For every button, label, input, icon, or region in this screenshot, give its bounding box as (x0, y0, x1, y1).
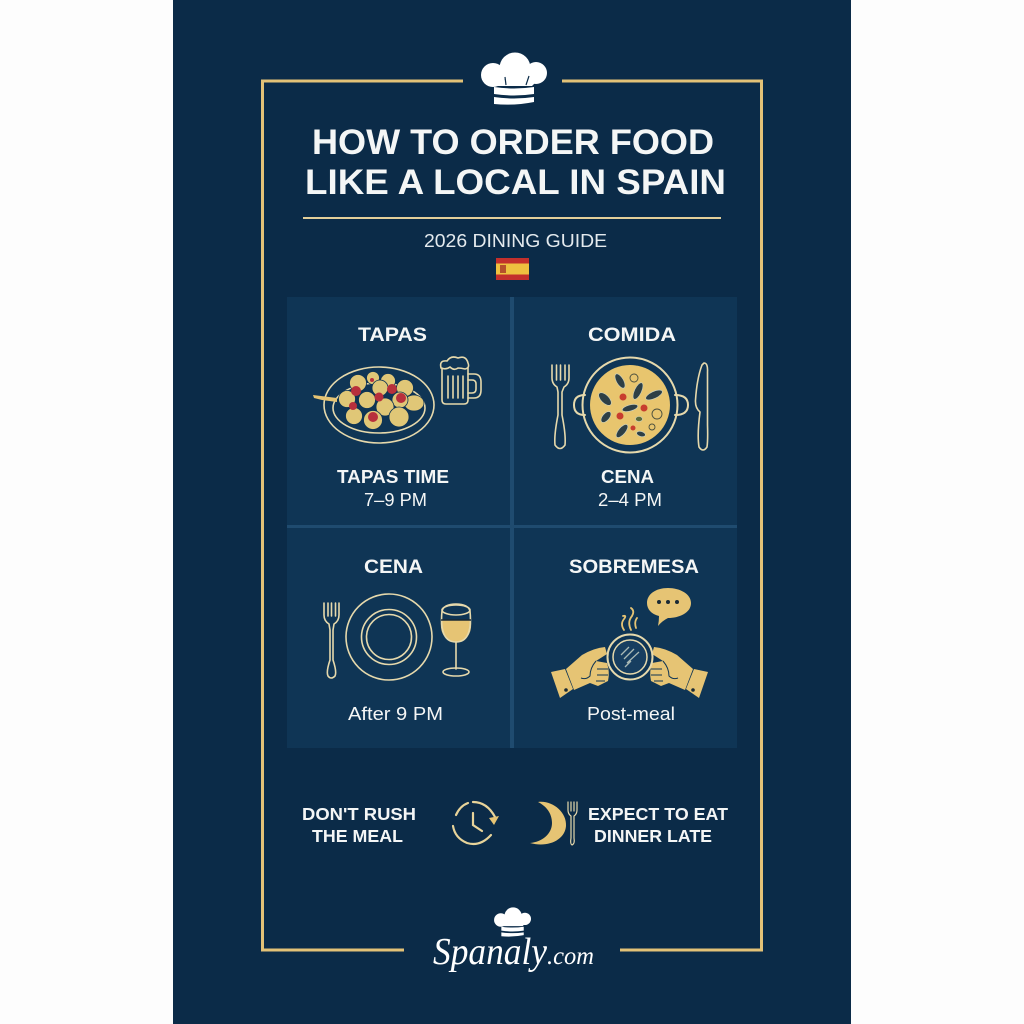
icon: tapas plate (313, 367, 434, 443)
title: HOW TO ORDER FOOD (312, 123, 714, 162)
label: 2-4 pm: 2–4 PM (598, 490, 662, 510)
tip: expect to eat late: DINNER LATE (594, 826, 712, 846)
tip: don't rush: THE MEAL (312, 826, 403, 846)
icon: paella pan (574, 358, 688, 452)
icon: chef hat footer (494, 907, 531, 937)
panel: sobremesa (514, 528, 737, 748)
icon: steam (622, 608, 637, 630)
background poster panel (173, 0, 851, 1024)
icon: fork (324, 603, 339, 678)
icon: wine glass (441, 604, 471, 676)
icon: hands holding cup (551, 634, 708, 698)
icon: chef hat top (481, 52, 547, 105)
tip: don't rush: DON'T RUSH (302, 804, 416, 824)
icon: clock with arrow (453, 802, 499, 844)
title (305, 123, 726, 202)
icon: knife (695, 363, 708, 450)
heading: cena: CENA (364, 557, 423, 578)
icon: plate (346, 594, 432, 680)
heading: tapas: TAPAS (358, 325, 427, 346)
icon: fork (552, 365, 569, 448)
icon: spanish flag (496, 258, 529, 280)
tip: don't rush (302, 804, 416, 846)
label: tapas time: TAPAS TIME (337, 467, 449, 487)
heading: comida: COMIDA (588, 325, 676, 346)
label: post-meal: Post-meal (587, 704, 675, 724)
icon: beer mug (441, 357, 481, 404)
footer brand: .com (547, 943, 594, 970)
title: LIKE A LOCAL IN SPAIN (305, 163, 726, 202)
panel: tapas (287, 297, 510, 525)
footer brand: Spanaly (433, 931, 547, 973)
icon: moon and fork (530, 802, 577, 845)
title divider (303, 217, 721, 219)
gold frame (262, 81, 762, 950)
panel: cena (287, 528, 510, 748)
heading: sobremesa: SOBREMESA (569, 557, 699, 578)
panel: comida (514, 297, 737, 525)
grid backing lines (287, 297, 737, 748)
label: cena: CENA (601, 467, 654, 487)
tip: expect to eat late: EXPECT TO EAT (588, 804, 728, 824)
label: after 9 pm: After 9 PM (348, 704, 443, 724)
label: 7-9 pm: 7–9 PM (364, 490, 427, 510)
subtitle: 2026 DINING GUIDE (424, 231, 607, 251)
tip: expect to eat late (588, 804, 728, 846)
icon: speech bubble (647, 588, 691, 626)
